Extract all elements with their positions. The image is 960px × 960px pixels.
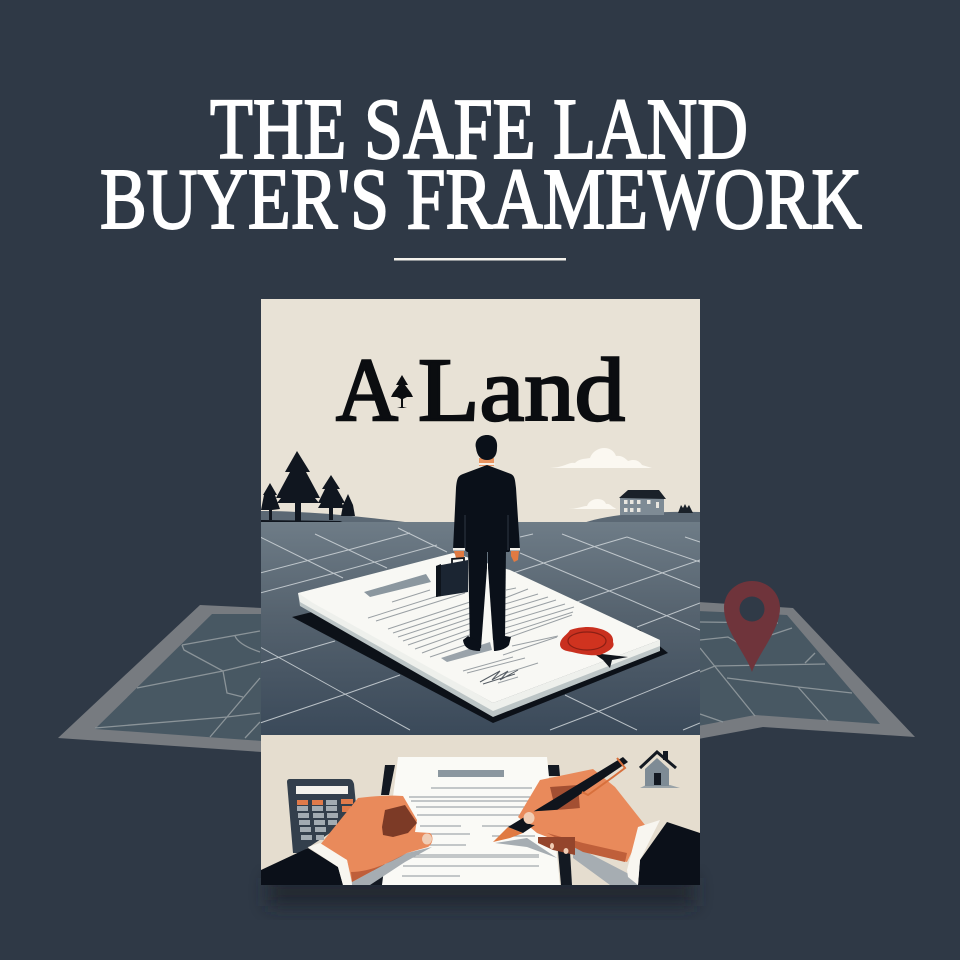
right hand lower band [547,833,627,862]
contract lines [402,788,539,876]
document text lines [368,588,574,683]
contract paper [382,757,560,885]
shoes [463,636,511,651]
divider between cover sections [261,733,700,736]
icon: calculator [287,779,357,853]
cover drop shadow [268,878,694,906]
folded map: left wing [58,605,262,752]
right palm [518,769,645,862]
cover title: A [336,341,398,440]
title [100,80,862,247]
cloud [550,448,652,468]
right hand shadow [495,838,557,858]
man's shadow on document [441,642,492,662]
folded map: right wing [698,602,915,739]
document signature [480,670,518,684]
icon: title tree [391,375,413,408]
left hand fingers [382,805,417,837]
icon: small house [640,751,680,788]
figure: businessman from behind [436,435,520,651]
wax seal with ribbon [560,627,628,668]
document shadow [292,590,668,723]
jacket arm seams [465,515,508,550]
cover title: Land [418,341,625,440]
left sleeve [261,848,343,885]
left hand [261,796,432,885]
title underline [394,258,566,260]
briefcase [436,558,468,597]
right fingers [538,837,575,855]
pen [493,757,628,842]
contract heading bar [438,770,504,777]
document heading bar [364,574,431,597]
head [476,435,497,466]
cover title [336,341,625,440]
jacket [453,465,520,552]
left hand shadow [352,847,432,885]
cover background [261,299,700,885]
right thumb [524,808,581,825]
clipboard [370,765,572,885]
landscape: right hill, cloud and house [550,448,700,523]
ground plane with grid [260,522,700,733]
cuffs and hands [453,548,465,550]
document lower sheets [298,593,660,717]
landscape: left hill and trees [261,451,405,523]
right sleeve [638,822,700,885]
title: THE SAFE LAND [210,80,748,177]
right hand [493,757,700,885]
document top sheet [298,553,660,703]
house [619,490,666,515]
left hand palm [320,796,432,882]
icon: map pin [724,581,780,672]
panel: signing scene [261,735,700,885]
document stack with seal [292,553,668,723]
legs [468,548,487,648]
panel: book cover [260,299,700,885]
left thumb nail [422,834,432,844]
